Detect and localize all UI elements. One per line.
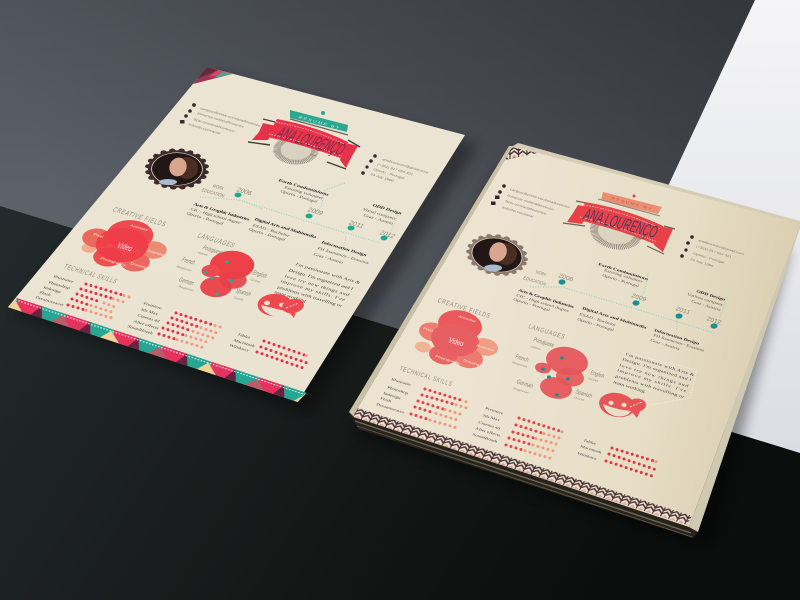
- venn diagram: creative fields: Illustrator: [476, 343, 496, 353]
- timeline: 2012: [705, 315, 723, 326]
- about paragraph: love try new things and: [618, 364, 689, 389]
- paper: left resume: ANA LOURENÇO: [273, 123, 350, 159]
- skills list: motion: SoundBooth: [127, 324, 155, 335]
- timeline: Information Design: [653, 329, 700, 346]
- skills list: motion: Cinema 4d: [478, 420, 502, 431]
- stack edges: [349, 143, 800, 538]
- skills list: platforms: Windows: [229, 343, 250, 352]
- skills list: motion: 3ds Max: [140, 307, 160, 316]
- heading: creative fields: CREATIVE FIELDS: [111, 205, 169, 228]
- skills list: motion: After effects: [133, 319, 160, 330]
- timeline: Graz - Austria: [312, 253, 345, 265]
- skills list: motion: Premiere: [143, 301, 163, 310]
- skills list: design: Dreamweaver: [35, 295, 65, 307]
- about paragraph: team working.: [612, 381, 646, 394]
- timeline: CIC - High school degree: [189, 208, 241, 225]
- timeline: ESAD - Bachelor: [251, 224, 290, 238]
- skills list: platforms: Macintosh: [233, 338, 257, 348]
- timeline: 2011: [674, 305, 692, 316]
- social links: behance.net/anaflourenco: [197, 112, 245, 129]
- heading: languages: LANGUAGES: [527, 322, 567, 341]
- skills list: motion: SoundBooth: [472, 432, 499, 444]
- heading: creative fields: CREATIVE FIELDS: [436, 296, 492, 320]
- venn diagram: creative fields: [77, 215, 171, 275]
- skills list: motion: Premiere: [485, 406, 504, 415]
- social links: flickr.com/anaflourenco: [505, 200, 547, 215]
- language bubbles: French: [180, 256, 197, 266]
- language bubbles: English: [251, 269, 269, 279]
- language bubbles: Beginner: [176, 265, 194, 272]
- skills list: motion: [472, 406, 504, 444]
- timeline: Earth Condominiums: [597, 263, 649, 282]
- timeline: Oporto - Portugal: [279, 190, 319, 204]
- skill dots: design: [68, 284, 129, 318]
- about paragraph: love try new things and: [283, 274, 351, 298]
- skill dots: motion: [506, 418, 566, 459]
- contact details: [361, 154, 429, 182]
- language bubbles: Beginner: [513, 387, 530, 395]
- skills list: platforms: [229, 332, 257, 352]
- skills list: design: [376, 377, 412, 414]
- language bubbles: English: [589, 369, 606, 380]
- venn diagram: creative fields: Pixel: [93, 232, 105, 239]
- corner decoration: [193, 67, 232, 84]
- contact details: anaflourenco@gmail.com: [382, 158, 429, 174]
- skills list: design: [35, 274, 75, 307]
- about paragraph: Design. I'm organized and I: [287, 268, 355, 292]
- shadow: right paper stack: [355, 165, 790, 550]
- timeline: ODD Design: [371, 204, 402, 216]
- venn diagram: creative fields: Illustrator: [146, 248, 167, 257]
- timeline: Oporto - Portugal: [602, 273, 640, 288]
- about paragraph: [273, 262, 361, 309]
- language bubbles: German: [515, 378, 535, 389]
- timeline: WORK: [211, 184, 226, 192]
- timeline: 2006: [557, 272, 575, 283]
- contact details: [680, 235, 745, 268]
- skill dots: design: [411, 389, 470, 428]
- timeline: ODD Design: [695, 290, 726, 302]
- profile photo badge: [462, 230, 532, 280]
- timeline: Oporto - Portugal: [513, 297, 551, 312]
- timeline: Estoring volunteer: [283, 186, 324, 201]
- social links: behance.net/anaflourenco: [507, 194, 554, 211]
- skills list: motion: [127, 301, 163, 335]
- skills list: design: Photoshop: [387, 385, 410, 395]
- profile photo badge: [138, 144, 216, 194]
- language bubbles: Good: [250, 278, 261, 283]
- timeline: Arts & Graphic Industries: [192, 203, 250, 222]
- icon: smiley with speech bubble: [252, 290, 305, 320]
- timeline: ESAD - Bachelor: [579, 312, 617, 327]
- background: grey surface: [0, 0, 800, 460]
- timeline: WORK: [534, 270, 547, 278]
- skills list: platforms: Windows: [577, 451, 597, 461]
- timeline: 2009: [630, 292, 648, 303]
- timeline: EDUCATION: [522, 276, 546, 287]
- about paragraph: problems with travelling or: [276, 285, 344, 309]
- language bubbles: [512, 336, 606, 402]
- timeline: 2012: [378, 229, 397, 240]
- about paragraph: team working.: [273, 290, 309, 304]
- contact details: Oporto - Portugal: [373, 168, 406, 180]
- venn diagram: creative fields: Pixel: [423, 326, 434, 333]
- bottom triangle band: [8, 298, 307, 402]
- timeline: 2011: [347, 219, 366, 230]
- skills list: platforms: [577, 438, 603, 461]
- venn diagram: creative fields: Animator: [458, 314, 478, 323]
- skill dots: motion: [159, 313, 220, 348]
- social links: linkedin.com/anaf: [502, 206, 534, 218]
- language bubbles: native: [530, 345, 541, 351]
- venn diagram: creative fields: Animator: [130, 223, 150, 232]
- skills list: design: Illustrator: [391, 377, 412, 387]
- social links: cargocollective.com/anaflourenco: [200, 107, 261, 127]
- timeline: Visual company: [361, 208, 398, 222]
- bottom chevron band: [353, 408, 692, 525]
- contact details: (+351) 917 654 321: [696, 245, 732, 259]
- skills list: design: Photoshop: [48, 280, 72, 290]
- venn diagram: creative fields: Drawing: [463, 358, 480, 367]
- venn diagram: creative fields: Photography: [100, 256, 128, 267]
- about paragraph: I'm passionate with Arts &: [624, 353, 695, 378]
- skills list: design: Indesign: [383, 391, 402, 400]
- timeline: Oporto - Portugal: [577, 317, 615, 332]
- language bubbles: Good: [233, 296, 244, 301]
- timeline: Digital Arts and Multimedia: [581, 307, 648, 330]
- about paragraph: improve my skills. I've: [616, 369, 688, 394]
- background: dark surface: [0, 206, 800, 600]
- social links: flickr.com/anaflourenco: [193, 118, 236, 133]
- skill dots: platforms: [606, 448, 660, 477]
- background: white sheet: [540, 0, 800, 460]
- language bubbles: native: [197, 251, 209, 257]
- timeline: [513, 263, 727, 352]
- timeline: [185, 179, 402, 266]
- timeline: Arts & Graphic Industries: [517, 289, 575, 310]
- about paragraph: Design. I'm organized and I: [621, 358, 692, 383]
- paragraph frame: [623, 352, 697, 405]
- timeline: 2009: [306, 206, 325, 217]
- title ribbon: [563, 192, 675, 254]
- language bubbles: Spanish: [234, 287, 253, 298]
- shadow: left paper: [14, 72, 478, 414]
- about paragraph: problems with travelling or: [614, 375, 685, 400]
- venn diagram: creative fields: Drawing: [130, 261, 148, 270]
- skill dots: platforms: [257, 341, 310, 368]
- language bubbles: Portuguese: [201, 244, 225, 256]
- skills list: design: Indesign: [43, 285, 63, 294]
- skills list: platforms: Tablet: [237, 332, 252, 340]
- social links: [180, 103, 261, 135]
- language bubbles: French: [514, 353, 530, 363]
- title ribbon: RESUME BY: [298, 115, 340, 130]
- timeline: Digital Arts and Multimedia: [253, 218, 317, 240]
- skills list: design: Flash: [39, 290, 53, 297]
- social links: [491, 184, 570, 218]
- timeline: FH Joanneum - Erasmus: [316, 247, 370, 266]
- icon: smiley with speech bubble: [595, 389, 646, 421]
- paper: right resume stack: TECHNICAL SKILLS: [398, 364, 454, 388]
- timeline: 2006: [235, 186, 254, 197]
- about paragraph: [612, 353, 695, 400]
- paper: right resume stack: [349, 143, 800, 538]
- about paragraph: improve my skills. I've: [279, 279, 347, 303]
- timeline: Graz - Austria: [362, 214, 395, 226]
- skills list: design: Dreamweaver: [376, 402, 406, 414]
- skills list: motion: Cinema 4d: [137, 313, 161, 323]
- paper: right resume stack: ANA LOURENÇO: [580, 205, 661, 242]
- venn diagram: creative fields: Photography: [435, 354, 461, 365]
- language bubbles: [176, 244, 269, 301]
- timeline: Information Design: [320, 241, 368, 258]
- timeline: Earth Condominiums: [277, 179, 329, 197]
- timeline: CIC - High school degree: [516, 293, 570, 313]
- contact details: anaflourenco@gmail.com: [698, 239, 745, 256]
- skills list: platforms: Tablet: [583, 438, 598, 446]
- heading: languages: LANGUAGES: [196, 231, 237, 249]
- paper: left resume: TECHNICAL SKILLS: [62, 262, 120, 285]
- social links: linkedin.com/anaf: [188, 123, 222, 135]
- timeline: FH Joanneum - Erasmus: [653, 333, 705, 352]
- language bubbles: Beginner: [512, 361, 529, 369]
- contact details: 24 July 1990: [690, 258, 714, 268]
- skills list: platforms: Macintosh: [580, 444, 603, 454]
- skills list: motion: 3ds Max: [482, 413, 501, 422]
- language bubbles: Beginner: [178, 285, 196, 292]
- venn diagram: creative fields: Video: [115, 241, 135, 253]
- language bubbles: Spanish: [574, 388, 594, 399]
- language bubbles: German: [177, 276, 196, 287]
- paper: left resume: [8, 67, 465, 402]
- social links: cargocollective.com/anaflourenco: [510, 188, 570, 209]
- title ribbon: RESUME BY: [611, 196, 653, 211]
- contact details: 24 July 1990: [370, 173, 394, 182]
- timeline: Oporto - Portugal: [185, 212, 225, 226]
- language bubbles: Good: [588, 377, 598, 383]
- language bubbles: Good: [574, 396, 584, 402]
- timeline: Oporto - Portugal: [247, 228, 287, 242]
- venn diagram: creative fields: Video: [447, 336, 465, 349]
- language bubbles: Portuguese: [532, 336, 555, 349]
- title ribbon: [248, 110, 360, 169]
- contact details: (+351) 917 654 321: [377, 163, 414, 176]
- timeline: EDUCATION: [200, 188, 226, 199]
- corner pattern: [505, 147, 537, 160]
- timeline: Various company: [687, 292, 725, 307]
- skills list: design: Illustrator: [53, 274, 75, 284]
- about paragraph: I'm passionate with Arts &: [294, 262, 361, 285]
- timeline: Estoring volunteer: [604, 268, 644, 284]
- venn diagram: creative fields: [413, 305, 501, 372]
- timeline: Graz - Austria: [650, 338, 681, 351]
- skills list: design: Flash: [380, 396, 393, 403]
- timeline: Graz - Austria: [691, 299, 722, 312]
- contact details: Oporto - Portugal: [693, 252, 725, 264]
- skills list: motion: After effects: [475, 426, 501, 437]
